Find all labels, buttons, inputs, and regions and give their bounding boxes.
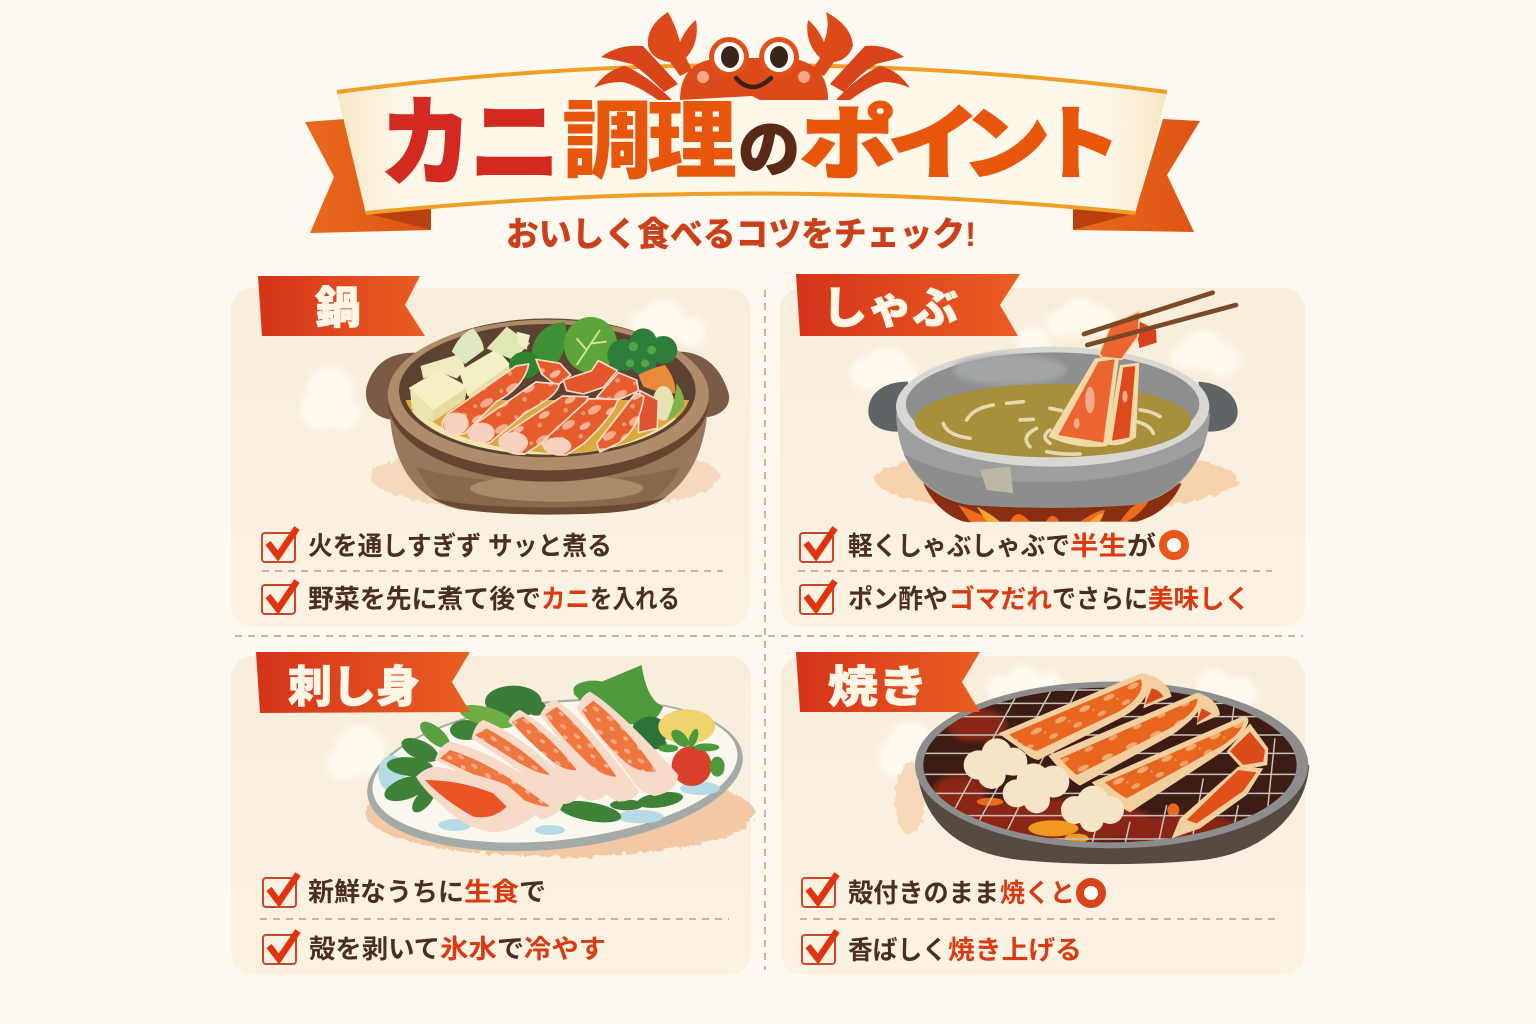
- check item 1: 新鮮なうちに: [308, 877, 464, 907]
- check item 1: [263, 874, 546, 907]
- check item 2: [263, 931, 606, 964]
- subtitle: おいしく食べるコツをチェック!: [506, 216, 976, 254]
- ribbon label yaki: [796, 652, 980, 712]
- ribbon label shabu: しゃぶ: [822, 284, 958, 333]
- flames: [977, 798, 1179, 843]
- check item 1: 軽くしゃぶしゃぶで: [848, 531, 1070, 561]
- splash: [895, 762, 925, 835]
- negi: [452, 327, 530, 364]
- vegetable right: [653, 383, 684, 421]
- burner: [923, 483, 1182, 522]
- panel: sashimi: [231, 652, 755, 975]
- ribbon tail right: [1073, 119, 1200, 232]
- crab slices: [416, 692, 678, 833]
- check item 2: [802, 931, 1082, 965]
- banner body: [337, 65, 1167, 214]
- title text: 理: [647, 94, 737, 190]
- check item 2: を入れる: [590, 584, 680, 614]
- ribbon label sashimi: 刺し身: [288, 663, 420, 712]
- splash: [875, 448, 1238, 512]
- title text: ニ: [470, 88, 560, 198]
- crab legs: [442, 359, 658, 455]
- crab legs: [998, 673, 1268, 838]
- panel background nabe: [231, 288, 750, 627]
- ribbon tail left: [305, 119, 431, 233]
- check item 2: 野菜を先に煮て後で: [308, 584, 541, 614]
- title banner: [305, 12, 1200, 254]
- check item 2: 美味しく: [1148, 584, 1250, 614]
- pot body: [390, 413, 707, 514]
- check item 1: [802, 874, 1102, 908]
- check item 1: 殻付きのまま: [848, 878, 999, 908]
- splash: [370, 442, 720, 512]
- tofu: [410, 350, 510, 422]
- illustration: crab hot pot: [300, 299, 729, 515]
- illustration: grilled crab: [878, 665, 1310, 864]
- check item 1: 生食: [464, 877, 519, 907]
- crab leg: [1048, 311, 1157, 447]
- crab meat ends: [443, 412, 571, 455]
- panel background yaki: [781, 656, 1305, 975]
- steam clouds: [878, 665, 1257, 777]
- stone base: [917, 765, 1309, 864]
- check item 2: で: [497, 934, 524, 964]
- tomato: [658, 727, 725, 786]
- check item 2: カニ: [541, 584, 590, 614]
- check item 1: で: [519, 877, 546, 907]
- title text: カ: [380, 88, 472, 198]
- crab smile: [697, 71, 810, 87]
- check item 1: 火を通しすぎず サッと煮る: [308, 531, 612, 561]
- check item 2: でさらに: [1052, 584, 1148, 614]
- check item 2: ゴマだれ: [949, 584, 1052, 614]
- check item 2: 焼き上げる: [948, 935, 1082, 965]
- panel background sashimi: [231, 656, 751, 975]
- embers: [933, 708, 1250, 848]
- pot handles: [868, 382, 1238, 432]
- title text: [380, 88, 1120, 198]
- check item 2: [800, 581, 1250, 614]
- pot rim: [896, 347, 1209, 467]
- carrot: [638, 365, 675, 393]
- title text: 調: [562, 94, 652, 190]
- checklist yaki: [800, 874, 1275, 965]
- illustration: shabu pot: [850, 293, 1240, 522]
- coals: [923, 688, 1297, 842]
- broth: [406, 400, 689, 455]
- check item 2: 氷水: [440, 934, 497, 964]
- title text: の: [738, 116, 800, 185]
- steam clouds: [850, 297, 1240, 393]
- check item 1: 焼くと: [1000, 878, 1075, 908]
- ribbon label sashimi: [256, 652, 470, 713]
- soup: [914, 384, 1191, 457]
- crab mascot: [594, 12, 910, 100]
- ribbon label nabe: [258, 276, 425, 336]
- pot body: [896, 413, 1210, 508]
- checklist shabu: [798, 528, 1272, 614]
- check item 2: [262, 581, 680, 614]
- grill wires: [924, 688, 1296, 842]
- ribbon label yaki: 焼き: [828, 663, 928, 712]
- title text: ン: [962, 100, 1050, 189]
- ribbon label shabu: [796, 274, 1020, 336]
- lemon: [658, 709, 715, 744]
- shiso leaves: [381, 665, 684, 826]
- plate: [360, 682, 750, 868]
- panel: nabe: [231, 276, 750, 627]
- grill rim: [915, 682, 1308, 848]
- title text: ト: [1040, 100, 1120, 189]
- illustration: sashimi plate: [327, 665, 755, 868]
- check item 1: 半生: [1070, 531, 1127, 561]
- pot rim: [388, 318, 709, 482]
- splash: [365, 770, 755, 857]
- crab legs: [594, 46, 910, 100]
- check item 1: [800, 528, 1185, 562]
- check item 2: 香ばしく: [848, 935, 947, 965]
- steam clouds: [327, 725, 387, 780]
- banner gold edges: [337, 65, 1167, 213]
- panel: yaki: [781, 652, 1310, 975]
- checklist sashimi: [260, 874, 729, 964]
- check item 2: 冷やす: [524, 934, 606, 964]
- check item 1: が: [1127, 531, 1156, 561]
- pot handles: [366, 352, 729, 419]
- title text: ポ: [800, 100, 896, 189]
- flames: [958, 502, 1148, 522]
- crab body: [680, 58, 828, 100]
- check item 2: ポン酢や: [848, 584, 948, 614]
- checklist nabe: [262, 528, 723, 614]
- steam clouds: [300, 299, 705, 430]
- panel: shabu: [780, 274, 1305, 627]
- panel background shabu: [780, 288, 1305, 627]
- check item 2: 殻を剥いて: [309, 934, 440, 964]
- title text: イ: [888, 100, 980, 189]
- greens: [509, 317, 677, 378]
- chopsticks: [1084, 293, 1236, 345]
- plate blue accents: [378, 755, 720, 835]
- crab eyes: [709, 37, 799, 77]
- crab claws: [648, 12, 853, 76]
- soup swirls: [943, 402, 1160, 454]
- ribbon label nabe: 鍋: [315, 284, 361, 333]
- crab meat: [964, 738, 1124, 832]
